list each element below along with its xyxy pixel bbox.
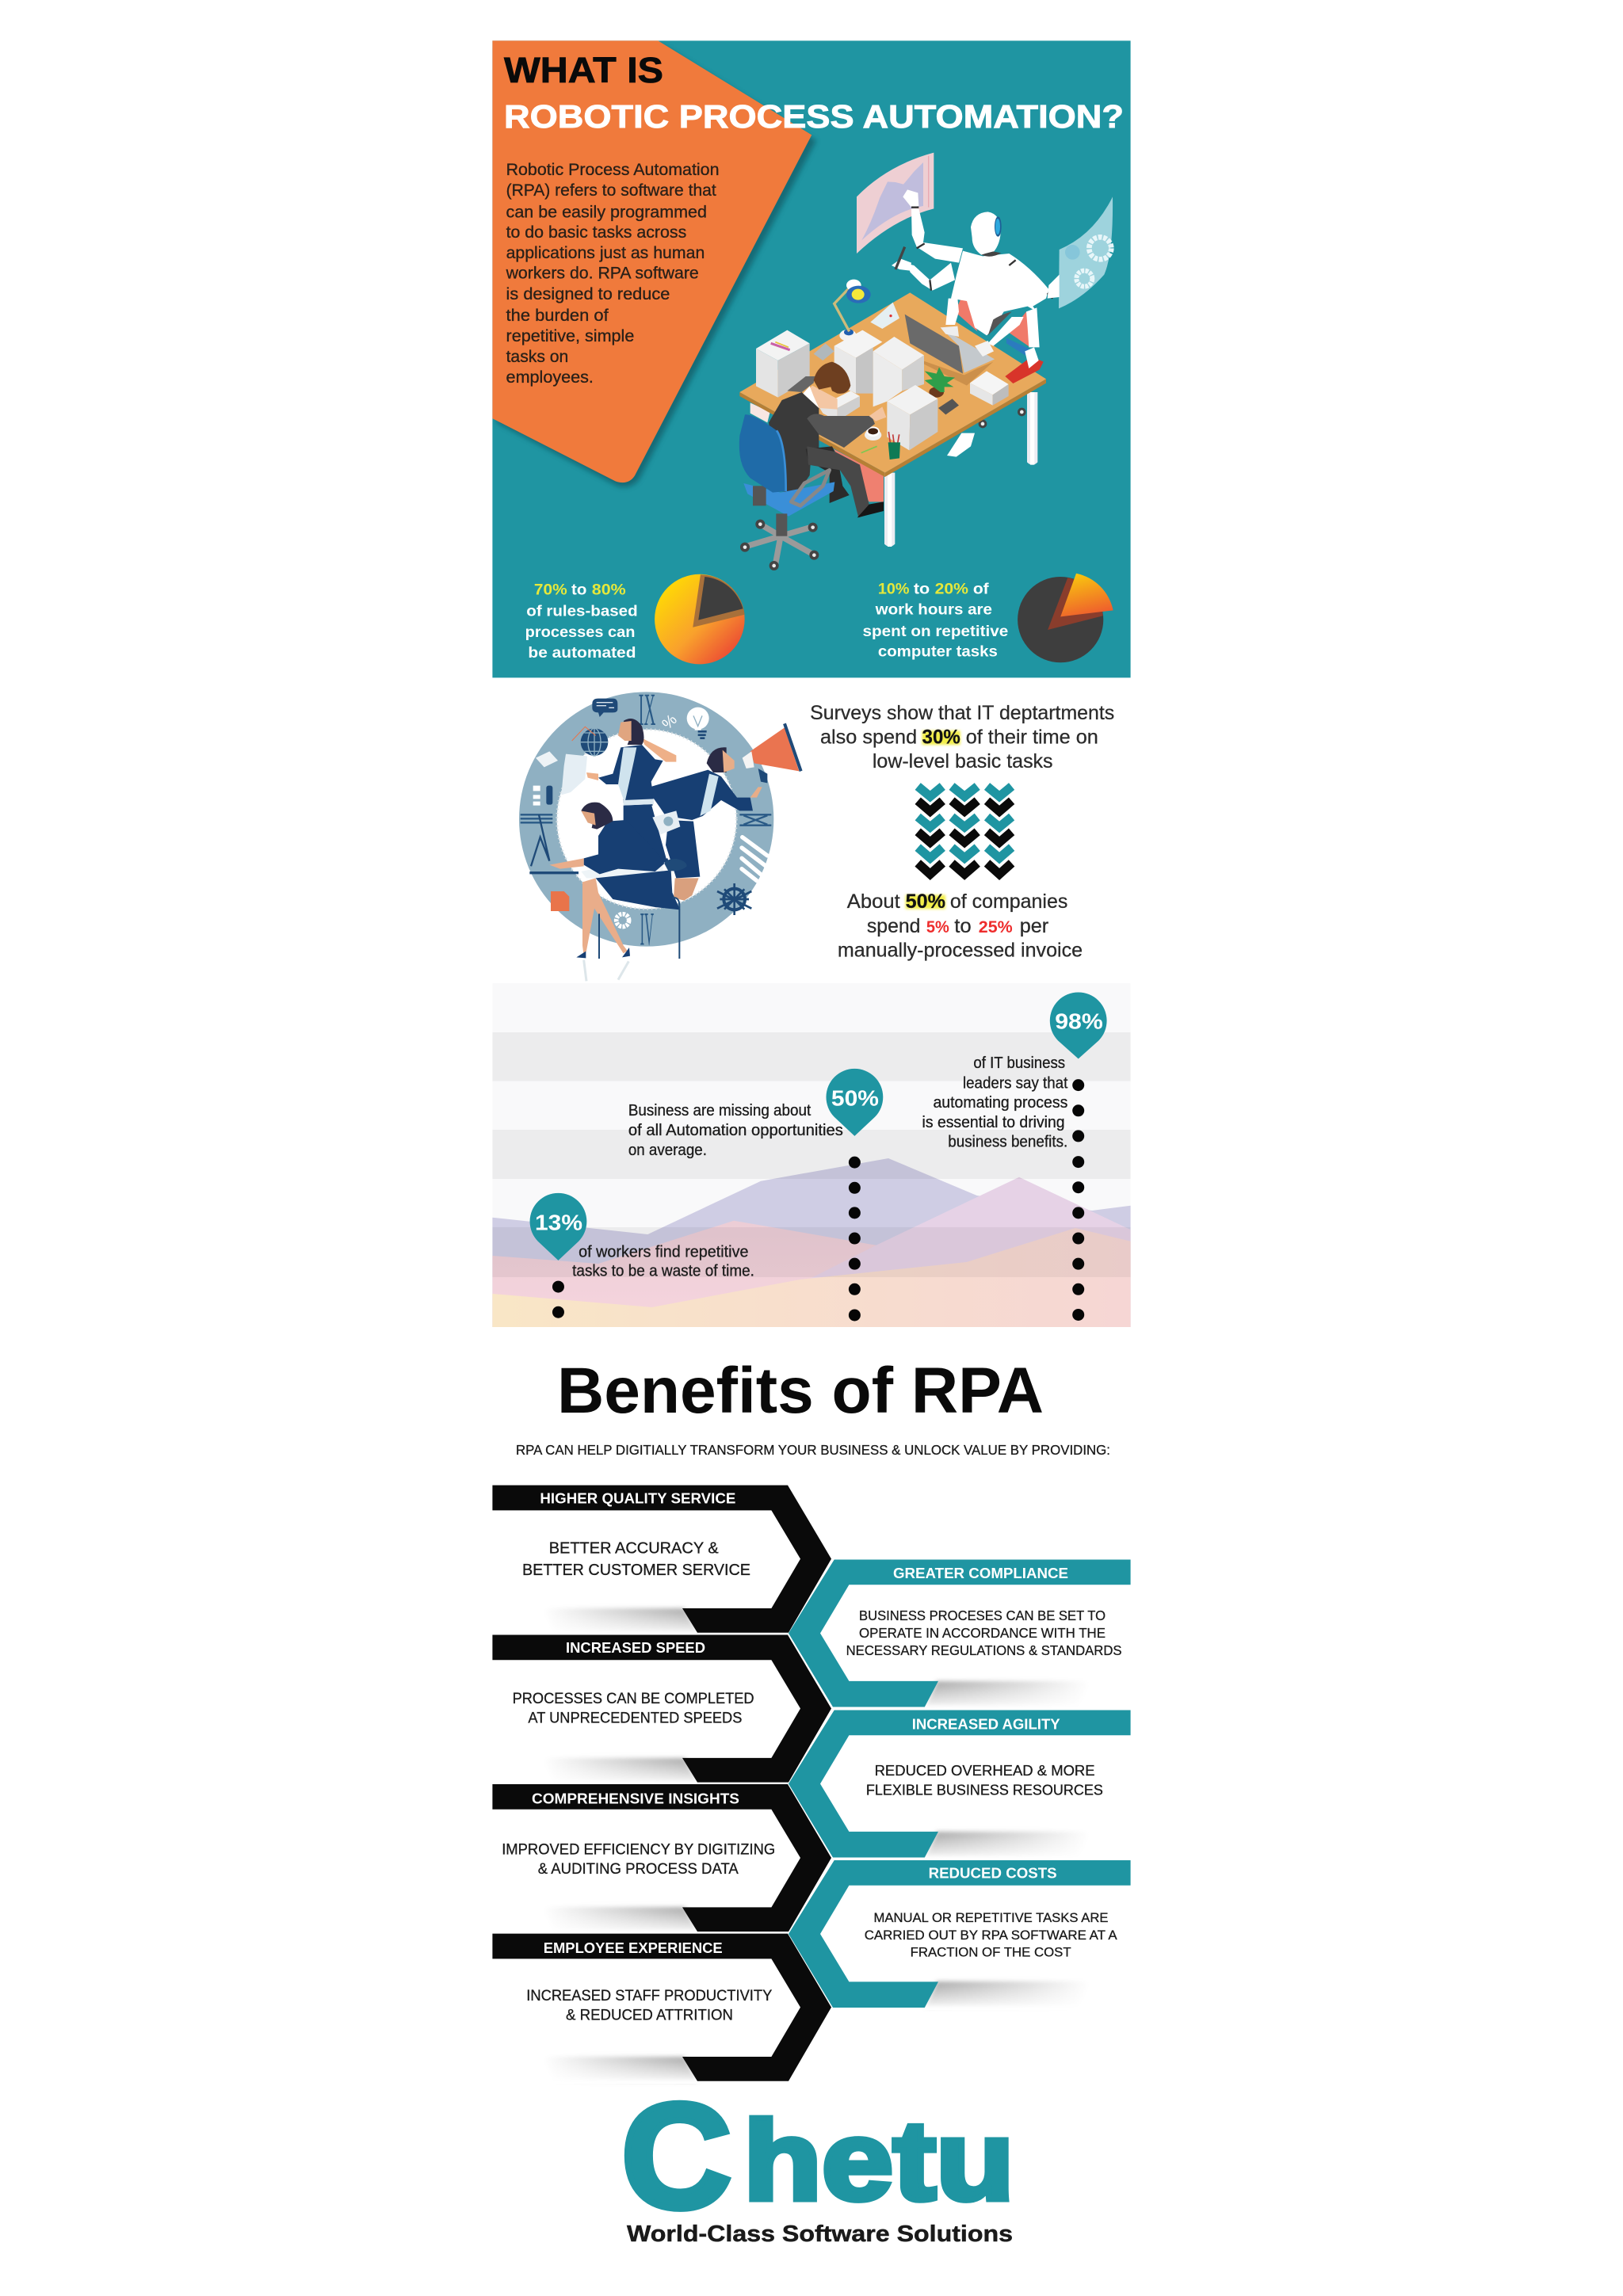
dotted line: 98 percent	[1072, 1079, 1084, 1321]
org chart icon	[533, 786, 552, 806]
card: greater compliance: NECESSARY REGULATIONS & STANDARDS	[846, 1642, 1122, 1658]
card: increased speed: INCREASED SPEED	[566, 1639, 705, 1656]
text: 98 percent: automating process	[933, 1094, 1067, 1112]
small paper box	[970, 371, 1009, 406]
card: employee experience: & REDUCED ATTRITION	[566, 2007, 733, 2023]
card: greater compliance: OPERATE IN ACCORDANCE WITH THE	[859, 1625, 1106, 1641]
shadows under hexagon tabs	[535, 1608, 1098, 2084]
card: reduced costs: REDUCED COSTS	[929, 1865, 1057, 1882]
card: employee experience: INCREASED STAFF PRODUCTIVITY	[526, 1988, 773, 2004]
stat: 70 to 80 percent: of rules-based	[526, 602, 638, 620]
text: 50 percent: on average.	[628, 1142, 707, 1159]
desk legs	[884, 392, 1037, 547]
panel background	[492, 983, 1131, 1327]
clock side marks	[521, 814, 771, 826]
teal panel background	[492, 40, 1131, 677]
pin: 50 percent	[826, 1069, 883, 1136]
chevron stack icon	[918, 786, 1012, 874]
orange shape shadow	[497, 45, 816, 487]
envelope icon	[536, 751, 558, 767]
text: 13 percent: tasks to be a waste of time.	[572, 1263, 754, 1280]
paper stack A	[756, 330, 810, 398]
clock ring	[519, 692, 773, 947]
pin: 50 percent: 50%	[831, 1085, 879, 1110]
card: higher quality service: BETTER CUSTOMER SERVICE	[522, 1562, 750, 1579]
survey text: also spend	[820, 727, 917, 748]
title line one: WHAT IS	[504, 50, 663, 90]
pin: 13 percent: 13%	[535, 1210, 582, 1234]
text: 98 percent: is essential to driving	[922, 1114, 1065, 1131]
dotted line: 13 percent	[552, 1281, 564, 1318]
card: greater compliance	[789, 1559, 1131, 1707]
office chair	[739, 414, 834, 570]
panel: automation statistics	[492, 983, 1131, 1327]
survey text: Surveys show that IT deptartments	[810, 703, 1114, 724]
globe icon	[572, 727, 608, 756]
megaphone	[743, 723, 801, 783]
card: greater compliance: BUSINESS PROCESES CAN BE SET TO	[859, 1608, 1106, 1623]
stat: 70 to 80 percent: to	[571, 582, 586, 599]
intro text: tasks on	[506, 347, 568, 366]
document icon	[551, 891, 569, 911]
card: increased speed: AT UNPRECEDENTED SPEEDS	[528, 1710, 742, 1727]
highlight: 50%	[906, 895, 945, 909]
pie chart: 70 to 80 percent	[655, 574, 745, 664]
pie chart: 10 to 20 percent	[1018, 574, 1113, 662]
intro text: employees.	[506, 368, 594, 387]
card: higher quality service	[492, 1486, 831, 1633]
invoice text: About	[847, 891, 900, 913]
card: increased agility	[789, 1710, 1131, 1857]
illustration: multitasking women and clock: IV	[640, 903, 654, 955]
panel: benefits of RPA	[492, 1355, 1131, 2084]
worker head and arm	[803, 362, 886, 448]
invoice text: 5%	[926, 917, 949, 936]
stool	[599, 859, 687, 959]
intro text: Robotic Process Automation	[506, 160, 719, 179]
calculator	[814, 343, 834, 360]
intro text: applications just as human	[506, 243, 705, 262]
speech bubble icon	[592, 699, 617, 717]
woman with megaphone	[650, 747, 762, 901]
intro text: the burden of	[506, 306, 609, 325]
seated woman typing	[549, 803, 680, 958]
card: comprehensive insights	[492, 1784, 831, 1932]
intro text	[506, 160, 719, 387]
stat: 10 to 20 percent	[863, 580, 1008, 661]
intro text: is designed to reduce	[506, 284, 670, 303]
invoice text: 25%	[979, 917, 1013, 936]
paper stack D	[887, 385, 938, 450]
floor reflection	[584, 960, 628, 981]
stat: 10 to 20 percent: to	[914, 580, 930, 597]
title line two: ROBOTIC PROCESS AUTOMATION?	[504, 98, 1124, 135]
stat: 10 to 20 percent: 20%	[935, 580, 968, 597]
intro text: (RPA) refers to software that	[506, 181, 716, 200]
invoice text: to	[954, 916, 972, 937]
computer icon	[529, 814, 579, 873]
logo tagline: World-Class Software Solutions	[627, 2222, 1013, 2247]
dotted line: 50 percent	[849, 1157, 861, 1321]
left holographic screen	[857, 153, 934, 254]
title	[504, 50, 1124, 135]
text: 50 percent: Business are missing about	[628, 1102, 812, 1119]
benefits heading: Benefits of RPA	[557, 1355, 1044, 1427]
text: 98 percent: of IT business	[973, 1055, 1065, 1072]
text: 50 percent: of all Automation opportunities	[628, 1122, 843, 1139]
illustration: multitasking women and clock	[519, 684, 801, 981]
desk lamp	[834, 280, 871, 341]
card: higher quality service: BETTER ACCURACY &	[549, 1539, 719, 1557]
card: reduced costs: MANUAL OR REPETITIVE TASKS ARE	[873, 1910, 1108, 1925]
salmon desk panel	[834, 449, 884, 502]
woman standing with phone	[586, 719, 676, 864]
card: increased agility: FLEXIBLE BUSINESS RESOURCES	[866, 1781, 1103, 1798]
stat: 10 to 20 percent: 10%	[878, 580, 910, 597]
pin: 98 percent: 98%	[1055, 1009, 1103, 1033]
ship wheel icon	[717, 883, 751, 915]
gear icon	[617, 914, 629, 927]
pencil holder	[888, 432, 900, 460]
logo wordmark: C	[621, 2073, 731, 2239]
text: 13 percent: of workers find repetitive	[579, 1244, 748, 1261]
logo: Chetu	[621, 2073, 1014, 2247]
intro text: workers do. RPA software	[506, 263, 699, 282]
green pen	[861, 446, 877, 453]
horizontal bands	[492, 1032, 1131, 1277]
paper sheet	[561, 754, 587, 795]
card: increased agility: REDUCED OVERHEAD & MORE	[875, 1762, 1095, 1779]
stat: 70 to 80 percent: processes can	[525, 624, 635, 641]
text: 98 percent: leaders say that	[963, 1074, 1068, 1092]
invoice text: 50%	[906, 891, 945, 913]
chair headrest shadow	[787, 376, 815, 392]
logo wordmark	[621, 2073, 1014, 2239]
desk side panel	[750, 402, 770, 422]
right holographic screen	[1059, 196, 1113, 308]
stat: 70 to 80 percent: 80%	[592, 582, 626, 599]
survey text: low-level basic tasks	[873, 751, 1053, 772]
card: comprehensive insights: IMPROVED EFFICIENCY BY DIGITIZING	[502, 1841, 775, 1859]
desk casters	[979, 408, 1026, 428]
stat: 70 to 80 percent: be automated	[528, 644, 636, 662]
pin: 13 percent	[530, 1193, 586, 1261]
card: reduced costs: CARRIED OUT BY RPA SOFTWARE AT A	[865, 1928, 1117, 1943]
pin: 98 percent	[1050, 992, 1107, 1058]
card: increased agility: INCREASED AGILITY	[912, 1716, 1060, 1733]
red book	[1005, 357, 1044, 383]
clock face	[557, 730, 736, 909]
text: 50 percent	[628, 1102, 843, 1159]
mountain layers	[492, 1158, 1131, 1327]
robot lower arms and hands	[941, 299, 1029, 357]
stat: 10 to 20 percent: work hours are	[875, 601, 992, 619]
survey text: 30%	[922, 727, 960, 748]
card: reduced costs: FRACTION OF THE COST	[911, 1945, 1071, 1960]
card: increased speed: PROCESSES CAN BE COMPLETED	[513, 1691, 754, 1707]
paper stack C	[873, 337, 924, 406]
stat: 10 to 20 percent: computer tasks	[878, 643, 998, 661]
logo wordmark: hetu	[743, 2098, 1014, 2224]
text: 98 percent: business benefits.	[948, 1133, 1067, 1150]
orange shape	[492, 40, 812, 482]
worker jacket back	[769, 392, 819, 493]
laptop	[905, 315, 995, 374]
invoice text: manually-processed invoice	[838, 940, 1083, 961]
percent symbol: %	[659, 711, 681, 733]
paper stack near head	[819, 391, 860, 421]
card: increased speed	[492, 1635, 831, 1783]
clock numerals	[639, 684, 655, 955]
card: employee experience	[492, 1934, 831, 2081]
text: 13 percent	[572, 1244, 754, 1280]
text: 98 percent	[922, 1055, 1068, 1150]
intro text: can be easily programmed	[506, 202, 707, 221]
plant	[925, 367, 955, 398]
clock white stripes	[742, 837, 767, 881]
stat: 10 to 20 percent: spent on repetitive	[863, 623, 1008, 640]
card: comprehensive insights: & AUDITING PROCESS DATA	[538, 1861, 739, 1878]
invoice text: of companies	[950, 891, 1067, 913]
stat: 70 to 80 percent: 70%	[534, 582, 567, 599]
desk top	[739, 292, 1046, 477]
intro text: to do basic tasks across	[506, 223, 686, 242]
light bulb icon	[687, 707, 709, 738]
invoice text: per	[1020, 916, 1048, 937]
survey text: of their time on	[966, 727, 1098, 748]
card: comprehensive insights: COMPREHENSIVE INSIGHTS	[532, 1791, 739, 1806]
calendar	[870, 303, 899, 329]
invoice text: spend	[867, 916, 920, 937]
robot arm on book	[1025, 307, 1040, 368]
robot foot under desk	[947, 433, 975, 457]
illustration: multitasking women and clock: IX	[639, 684, 655, 735]
worker legs	[806, 446, 884, 517]
benefits subtitle: RPA CAN HELP DIGITIALLY TRANSFORM YOUR BUSINESS & UNLOCK VALUE BY PROVIDING:	[516, 1442, 1110, 1458]
card: higher quality service: HIGHER QUALITY SERVICE	[540, 1489, 735, 1507]
coffee cup	[865, 426, 881, 441]
panel: IT survey	[519, 684, 1114, 981]
stat: 70 to 80 percent	[525, 582, 638, 662]
highlight: 30%	[922, 730, 960, 745]
phone on desk	[938, 399, 959, 414]
invoice text	[838, 891, 1083, 961]
paper stack B	[834, 330, 882, 394]
panel: what is RPA	[492, 40, 1131, 677]
survey text	[810, 703, 1114, 772]
stat: 10 to 20 percent: of	[973, 580, 989, 597]
illustration: robot and stressed worker at desk	[739, 153, 1113, 570]
card: greater compliance: GREATER COMPLIANCE	[893, 1565, 1068, 1581]
card: reduced costs	[789, 1860, 1131, 2008]
intro text: repetitive, simple	[506, 326, 634, 345]
robot upper body	[892, 189, 1060, 347]
card: employee experience: EMPLOYEE EXPERIENCE	[544, 1939, 723, 1956]
